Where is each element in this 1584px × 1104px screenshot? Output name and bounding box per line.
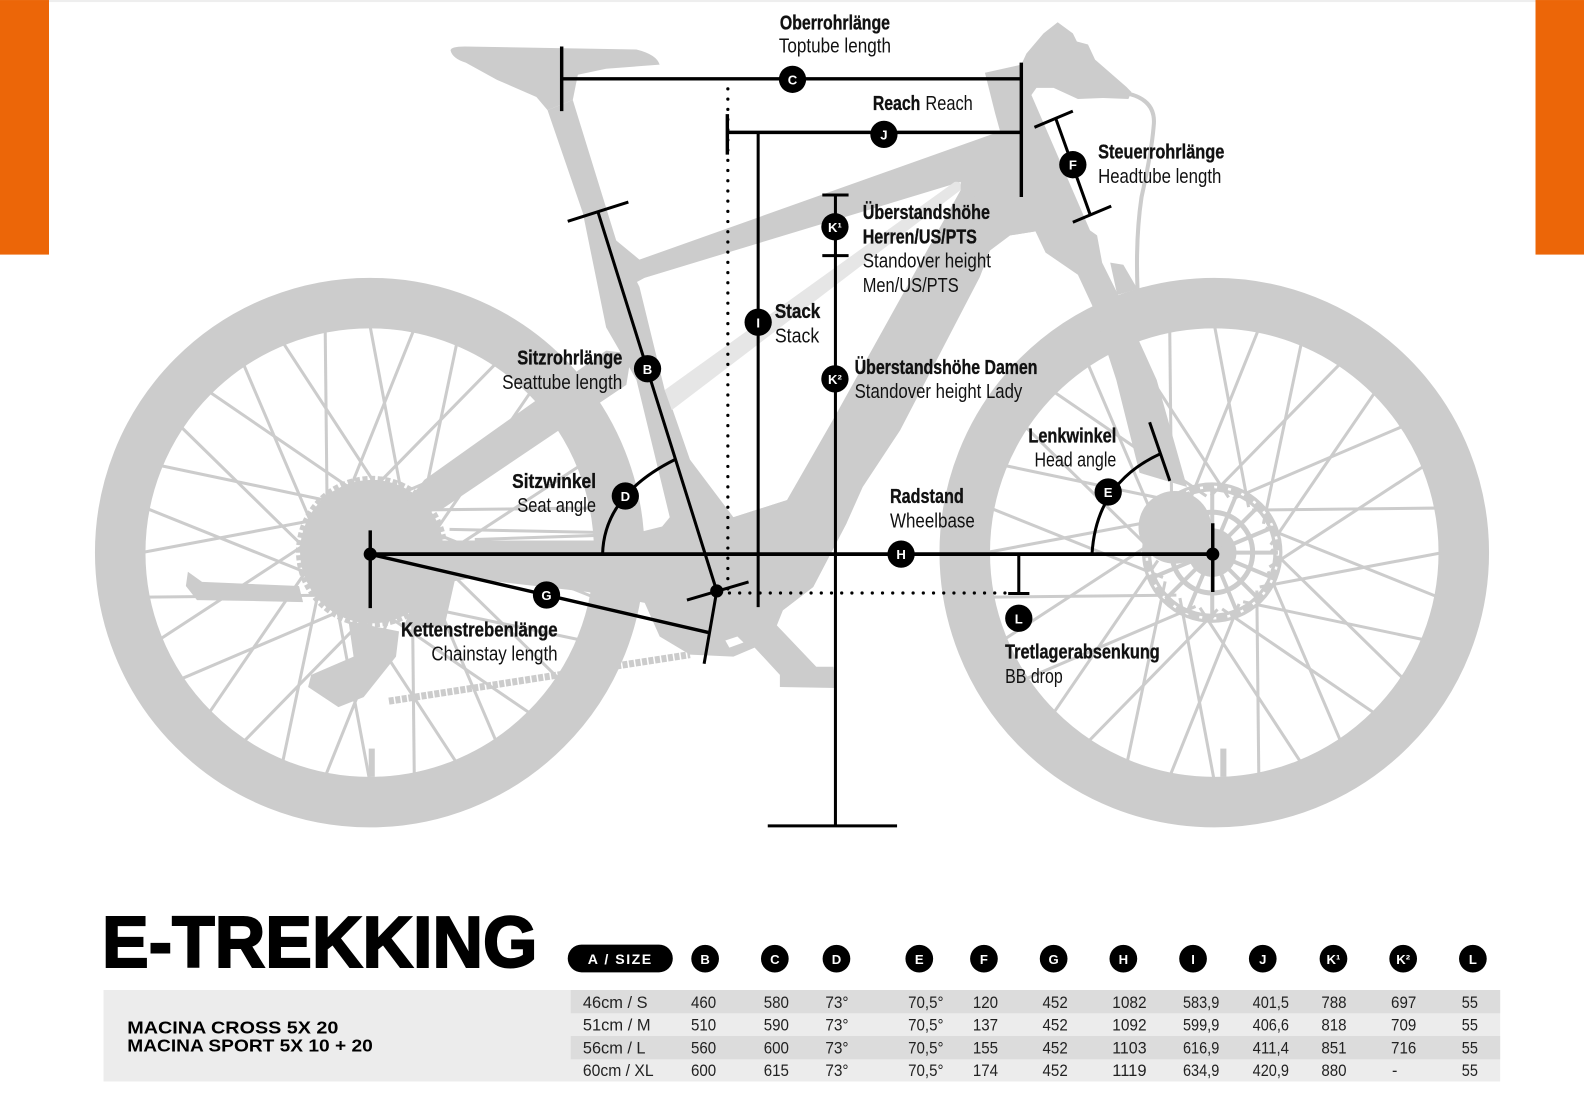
dimension G: chainstay	[370, 554, 708, 632]
rear axle marker	[364, 530, 377, 608]
header K2: K²	[1396, 952, 1411, 967]
rear derailleur	[186, 572, 399, 707]
seatstay	[404, 351, 631, 510]
badge K2: K²	[828, 372, 842, 387]
dimension L: BB drop	[1008, 554, 1029, 594]
badge D	[612, 482, 639, 510]
header I: I	[1191, 952, 1195, 967]
front wheel	[965, 303, 1464, 802]
dimension D: seat angle arc	[603, 460, 675, 554]
badge D: D	[621, 489, 630, 504]
label: BB drop	[1005, 642, 1160, 688]
header K2	[1389, 945, 1417, 973]
header C: C	[770, 952, 780, 967]
table row 46cm / S: 401,5	[1253, 994, 1289, 1012]
label: headtube	[1098, 142, 1224, 188]
table row 51cm / M: 818	[1321, 1016, 1347, 1034]
light rear tube	[665, 182, 961, 410]
label: seattube: Seattube length	[502, 372, 622, 394]
table row 60cm / XL	[583, 1062, 1478, 1080]
table row 60cm / XL: 600	[691, 1062, 716, 1080]
label: BB drop: Tretlagerabsenkung	[1005, 642, 1160, 664]
label: stack: Stack	[775, 325, 820, 347]
dimension F: headtube	[1034, 111, 1111, 222]
cable guide	[1110, 263, 1137, 295]
brake rotor	[1138, 487, 1278, 618]
table row 51cm / M: 1092	[1112, 1016, 1147, 1034]
brake cable	[1129, 94, 1154, 289]
label: toptube	[779, 12, 891, 58]
badge E: E	[1104, 485, 1113, 500]
badge H	[887, 540, 915, 568]
header F: F	[980, 952, 988, 967]
table row 51cm / M: 406,6	[1253, 1016, 1289, 1034]
table row 60cm / XL: 73°	[825, 1062, 849, 1080]
table row 60cm / XL: 70,5°	[908, 1062, 944, 1080]
orange tab left	[0, 0, 49, 255]
header H: H	[1119, 952, 1128, 967]
dimension E: head angle arc	[1092, 422, 1170, 554]
table row 60cm / XL: -	[1392, 1062, 1397, 1080]
table row 51cm / M: 51cm / M	[583, 1016, 651, 1034]
dimension I: stack	[757, 132, 760, 607]
badge H: H	[896, 547, 906, 562]
saddle and seatpost	[451, 46, 660, 110]
bike silhouette	[120, 22, 1464, 802]
table row 56cm / L: 55	[1462, 1040, 1478, 1058]
table row 46cm / S: 452	[1043, 994, 1068, 1012]
dimension C: toptube	[562, 46, 1021, 197]
table row 56cm / L: 452	[1043, 1040, 1068, 1058]
table row 56cm / L: 716	[1391, 1040, 1416, 1058]
table row 60cm / XL: 55	[1462, 1062, 1478, 1080]
table row 56cm / L	[583, 1040, 1478, 1058]
header E	[905, 945, 933, 973]
motor and crank	[644, 500, 847, 688]
badge K2	[821, 365, 849, 392]
motor slot	[725, 636, 744, 648]
table row 46cm / S: 120	[973, 994, 998, 1012]
header I	[1179, 945, 1207, 973]
label: head angle: Lenkwinkel	[1028, 425, 1116, 447]
label: seattube	[502, 348, 622, 394]
header H	[1110, 945, 1137, 973]
label: wheelbase: Wheelbase	[890, 510, 975, 532]
label: reach: Reach	[873, 93, 920, 115]
dimension lines	[364, 46, 1219, 826]
label: standover men	[863, 201, 991, 297]
dimension H: wheelbase	[370, 552, 1212, 556]
badge C: C	[788, 72, 798, 87]
header K1: K¹	[1327, 952, 1340, 967]
header: A / size	[568, 945, 673, 972]
bottom bracket marker	[687, 582, 749, 664]
table row 46cm / S: 46cm / S	[583, 994, 648, 1012]
table row 56cm / L: 70,5°	[908, 1040, 944, 1058]
chain	[389, 529, 690, 701]
rear wheel	[120, 303, 619, 802]
table row 56cm / L: 155	[973, 1040, 998, 1058]
label: chainstay: Kettenstrebenlänge	[401, 619, 558, 641]
label: head angle	[1028, 425, 1116, 472]
table row 46cm / S	[583, 994, 1478, 1012]
table row 56cm / L: 600	[764, 1040, 789, 1058]
label: standover men: Herren/US/PTS	[863, 226, 977, 248]
table row 46cm / S: 55	[1462, 994, 1478, 1012]
table row 56cm / L: 73°	[825, 1040, 849, 1058]
front axle marker	[1206, 523, 1219, 592]
table row 56cm / L: 616,9	[1183, 1040, 1219, 1058]
header K1	[1320, 945, 1347, 973]
label: wheelbase: Radstand	[890, 486, 964, 508]
table row 60cm / XL: 174	[973, 1062, 998, 1080]
table row 51cm / M: 137	[973, 1016, 998, 1034]
table row 51cm / M: 599,9	[1183, 1016, 1219, 1034]
badge I: I	[756, 315, 760, 330]
model names: MACINA SPORT 5X 10 + 20	[127, 1036, 373, 1056]
label: standover lady	[855, 356, 1037, 403]
table row 60cm / XL: 880	[1321, 1062, 1347, 1080]
badge E	[1095, 478, 1122, 506]
label: stack	[775, 301, 821, 347]
label: stack: Stack	[775, 301, 821, 323]
cassette	[299, 479, 444, 624]
header G: G	[1049, 952, 1059, 967]
label: head angle: Head angle	[1034, 450, 1116, 472]
label: seat angle: Seat angle	[517, 495, 596, 517]
badge F: F	[1069, 158, 1077, 173]
header B	[691, 945, 719, 973]
title: E-TREKKING	[102, 902, 537, 983]
badge J: J	[880, 127, 888, 142]
table row 60cm / XL: 615	[764, 1062, 789, 1080]
header L: L	[1469, 952, 1477, 967]
table row 46cm / S: 70,5°	[908, 994, 944, 1012]
table row 51cm / M: 452	[1043, 1016, 1068, 1034]
label: chainstay: Chainstay length	[431, 644, 558, 666]
table row 60cm / XL: 634,9	[1183, 1062, 1219, 1080]
badge G	[533, 581, 560, 609]
badge B	[634, 355, 661, 382]
table row 51cm / M: 590	[764, 1016, 789, 1034]
table row 46cm / S: 460	[691, 994, 716, 1012]
model names	[127, 1017, 373, 1056]
badge L	[1005, 605, 1032, 632]
table row 56cm / L: 411,4	[1253, 1040, 1289, 1058]
down tube	[733, 182, 1035, 610]
label: wheelbase	[890, 486, 975, 532]
header: A / size: A / SIZE	[588, 951, 653, 967]
table row 51cm / M: 70,5°	[908, 1016, 944, 1034]
dimension K: standover	[768, 195, 897, 826]
label: toptube: Toptube length	[779, 36, 891, 58]
header E: E	[915, 952, 924, 967]
header D	[823, 945, 850, 973]
table row 51cm / M: 73°	[825, 1016, 849, 1034]
dimension B: seattube	[568, 202, 717, 591]
label: BB drop: BB drop	[1005, 666, 1063, 688]
dotted construction lines	[719, 89, 1010, 593]
table row 60cm / XL: 1119	[1112, 1062, 1147, 1080]
head tube and fork	[961, 22, 1187, 487]
badge B: B	[643, 362, 652, 377]
table header badges	[568, 945, 1487, 973]
seat tube	[548, 100, 733, 596]
table row 51cm / M: 709	[1391, 1016, 1416, 1034]
header D: D	[832, 952, 841, 967]
badge K1	[821, 213, 849, 240]
table row 51cm / M	[583, 1016, 1478, 1034]
label: toptube: Oberrohrlänge	[780, 12, 890, 34]
badge L: L	[1015, 611, 1023, 626]
label: standover lady: Standover height Lady	[855, 381, 1023, 403]
badge I	[745, 309, 772, 336]
table row 56cm / L: 1103	[1112, 1040, 1147, 1058]
label: standover lady: Überstandshöhe Damen	[855, 356, 1037, 379]
dimension J: reach	[727, 114, 1021, 155]
header J: J	[1259, 952, 1266, 967]
table row 46cm / S: 1082	[1112, 994, 1147, 1012]
chainstay	[404, 525, 667, 626]
label: seat angle	[512, 471, 596, 517]
table row 56cm / L: 560	[691, 1040, 716, 1058]
top tube	[606, 131, 1000, 285]
table row 46cm / S: 697	[1391, 994, 1416, 1012]
badges on bike	[533, 66, 1122, 632]
table row 51cm / M: 55	[1462, 1016, 1478, 1034]
table row 60cm / XL: 420,9	[1253, 1062, 1289, 1080]
badge C	[779, 66, 806, 93]
table row 51cm / M: 510	[691, 1016, 716, 1034]
label: standover men: Standover height	[863, 251, 991, 273]
label: reach	[873, 93, 973, 115]
header F	[970, 945, 998, 973]
table row 46cm / S: 788	[1321, 994, 1347, 1012]
label: seat angle: Sitzwinkel	[512, 471, 596, 493]
header G	[1040, 945, 1067, 973]
badge K1: K¹	[828, 220, 842, 235]
label: chainstay	[401, 619, 558, 666]
badge F	[1059, 151, 1086, 178]
label: headtube: Steuerrohrlänge	[1098, 142, 1224, 164]
table background	[104, 990, 1500, 1081]
table row 46cm / S: 580	[764, 994, 789, 1012]
header B: B	[700, 952, 710, 967]
badge J	[870, 121, 898, 148]
table row 46cm / S: 73°	[825, 994, 849, 1012]
table row 60cm / XL: 452	[1043, 1062, 1068, 1080]
header L	[1459, 945, 1487, 973]
table row 56cm / L: 851	[1321, 1040, 1347, 1058]
label: seattube: Sitzrohrlänge	[517, 348, 622, 370]
label: standover men: Men/US/PTS	[863, 275, 959, 297]
orange tab right	[1536, 0, 1584, 255]
table row 60cm / XL: 60cm / XL	[583, 1062, 654, 1080]
label: standover men: Überstandshöhe	[863, 201, 990, 224]
model names: MACINA CROSS 5X 20	[127, 1017, 338, 1037]
table row 46cm / S: 583,9	[1183, 994, 1219, 1012]
table row 56cm / L: 56cm / L	[583, 1040, 646, 1058]
header C	[761, 945, 789, 973]
header J	[1249, 945, 1277, 973]
label: headtube: Headtube length	[1098, 166, 1221, 188]
label: reach: Reach	[925, 93, 973, 115]
badge G: G	[541, 588, 552, 603]
